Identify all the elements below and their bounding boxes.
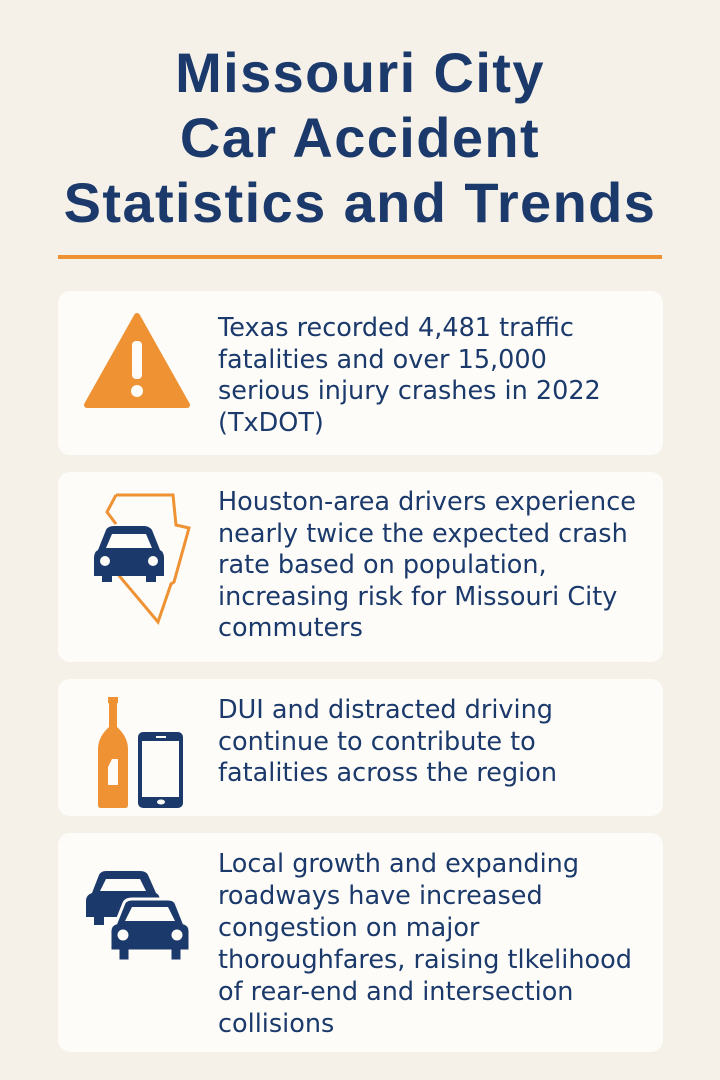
- icon: two cars: [86, 871, 188, 960]
- text block: increasing risk for Missouri City: [218, 582, 617, 612]
- title: Missouri City: [175, 41, 545, 104]
- panel: texas fatalities: [58, 291, 663, 455]
- text block: [218, 313, 601, 438]
- panel: houston crash rate: [58, 472, 663, 662]
- text block: roadways have increased: [218, 881, 543, 911]
- text block: collisions: [218, 1009, 334, 1039]
- text block: of rear-end and intersection: [218, 977, 573, 1007]
- text block: thoroughfares, raising tlkelihood: [218, 945, 632, 975]
- text block: DUI and distracted driving: [218, 695, 553, 725]
- panel: congestion: [58, 833, 663, 1052]
- text block: serious injury crashes in 2022: [218, 376, 601, 406]
- text block: rate based on population,: [218, 550, 547, 580]
- icon: car with map outline: [94, 494, 191, 625]
- text block: [218, 849, 632, 1039]
- title: [64, 41, 656, 234]
- panel: DUI and distracted: [58, 679, 663, 816]
- text block: Texas recorded 4,481 traffic: [218, 313, 574, 343]
- text block: nearly twice the expected crash: [218, 518, 628, 548]
- text block: congestion on major: [218, 913, 479, 943]
- text block: commuters: [218, 613, 363, 643]
- title: Car Accident: [180, 106, 540, 169]
- text block: fatalities across the region: [218, 758, 557, 788]
- text block: fatalities and over 15,000: [218, 344, 547, 374]
- icon: warning triangle: [84, 313, 190, 408]
- icon: bottle and phone: [98, 697, 183, 808]
- text block: [218, 487, 636, 643]
- text block: Houston-area drivers experience: [218, 487, 636, 517]
- title: Statistics and Trends: [64, 171, 656, 234]
- text block: (TxDOT): [218, 408, 324, 438]
- text block: Local growth and expanding: [218, 849, 579, 879]
- text block: [218, 695, 557, 788]
- text block: continue to contribute to: [218, 726, 536, 756]
